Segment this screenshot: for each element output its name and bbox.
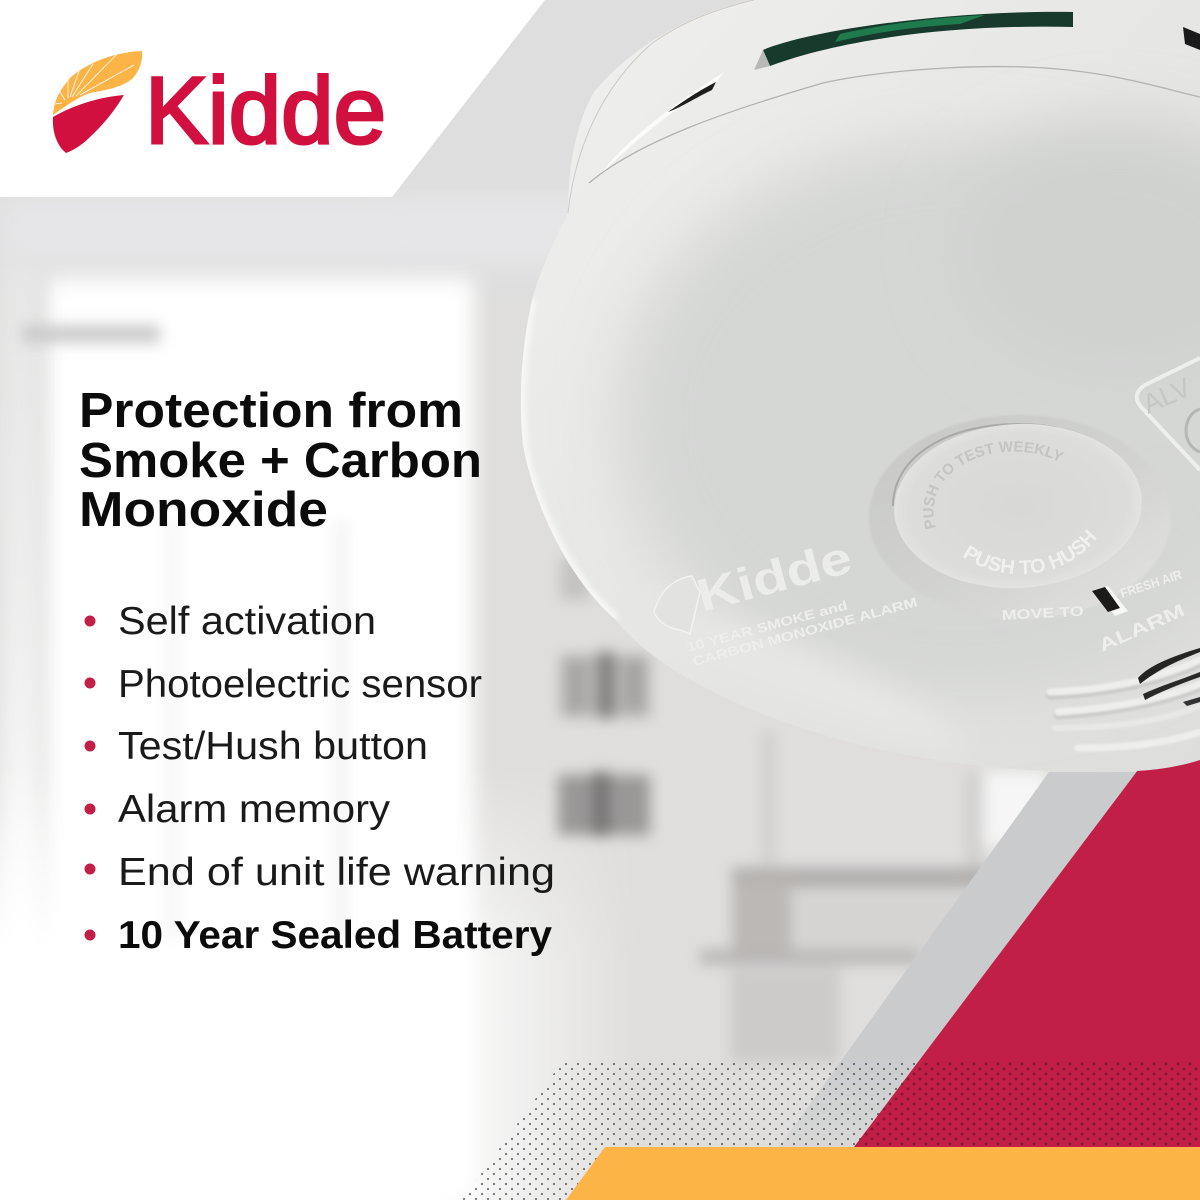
white logo panel [0, 0, 545, 197]
carbon monoxide panel corner: ALV [1138, 372, 1195, 419]
alarm body [521, 0, 1200, 772]
bullet: self activation: Self activation [118, 600, 376, 643]
heading: Smoke + Carbon [79, 434, 482, 488]
bullet: alarm memory: Alarm memory [118, 788, 391, 831]
lower left white fade [0, 837, 584, 1200]
top housing vents [568, 0, 1200, 213]
embossed brand and labels: MOVE TO [1001, 603, 1084, 623]
heading: Protection from [79, 384, 463, 438]
bright window [44, 272, 481, 937]
bullet: end of unit life warning: End of unit life warning [118, 851, 555, 894]
heading [79, 384, 482, 537]
embossed brand and labels: ALARM [1095, 600, 1188, 656]
sounder vents [1050, 648, 1200, 748]
halftone dot band [462, 1062, 1200, 1200]
Kidde logo [53, 51, 386, 164]
embossed brand and labels: CARBON MONOXIDE ALARM [691, 594, 919, 669]
left wall band [0, 280, 40, 904]
test hush button: PUSH TO HUSH [963, 530, 1097, 574]
embossed brand and labels: Kidde [691, 531, 857, 622]
bullet: photoelectric sensor: Photoelectric sensor [118, 663, 482, 706]
wordmark: Kidde [145, 58, 386, 164]
orange base band [566, 1147, 1200, 1200]
feature list [84, 600, 555, 957]
logo mark: red leaf [53, 95, 124, 153]
blurred shelf and room detail [700, 730, 1045, 1063]
blurred wall pictures [558, 558, 650, 836]
red diagonal panel [854, 755, 1200, 1147]
embossed brand and labels [654, 548, 1184, 664]
face shading [521, 110, 1200, 688]
embossed brand and labels: FRESH AIR [1118, 567, 1184, 601]
indicator light [1092, 586, 1128, 616]
bullet: 10 year sealed battery: 10 Year Sealed Battery [118, 914, 552, 957]
smoke alarm photo [520, 0, 1200, 771]
test hush button: PUSH TO TEST WEEKLY [923, 441, 1064, 529]
grey diagonal stripe [779, 772, 1138, 1147]
heading: Monoxide [79, 483, 328, 537]
logo mark: orange sun [53, 51, 142, 115]
embossed brand and labels: 10 YEAR SMOKE and [685, 597, 849, 655]
carbon monoxide panel corner [1137, 358, 1200, 470]
test hush button [870, 416, 1146, 602]
bullet: test hush button: Test/Hush button [118, 725, 428, 768]
